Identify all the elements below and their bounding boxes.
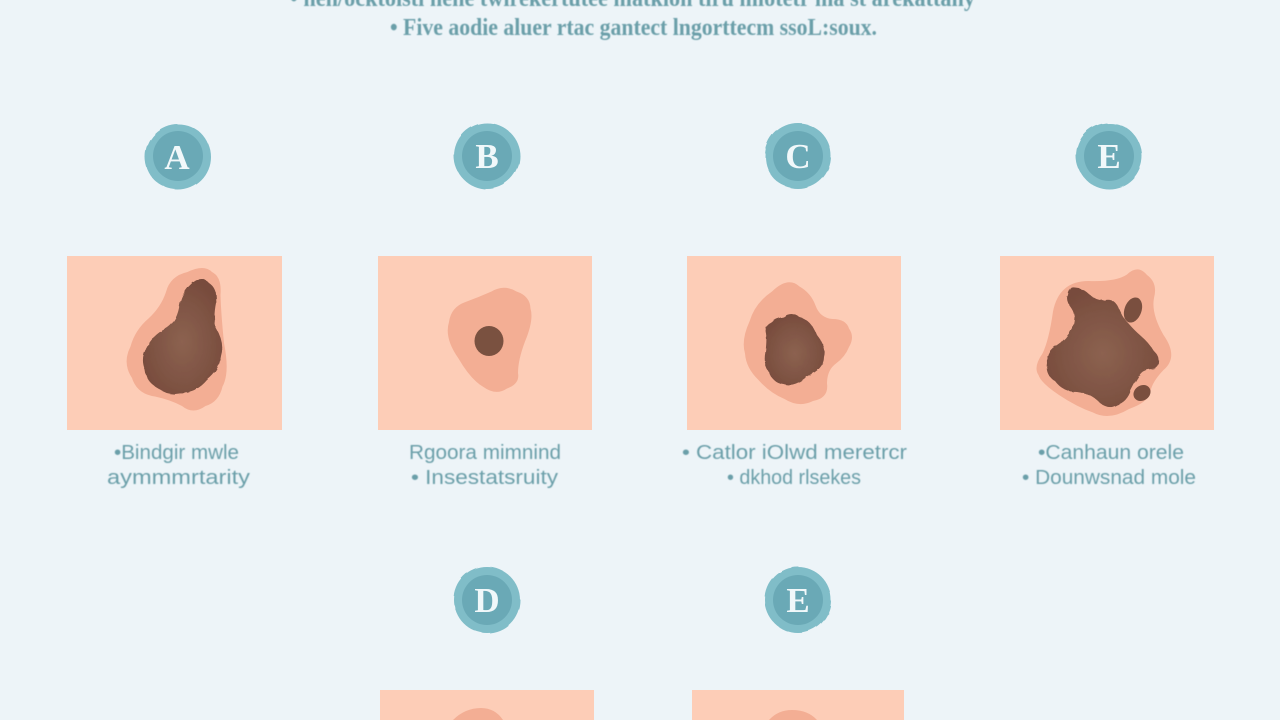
mole [765, 314, 825, 385]
caption: panel A: •Bindgir mwle [114, 442, 239, 464]
caption: panel E [1022, 442, 1196, 489]
badge: B [454, 123, 520, 189]
halo [127, 268, 227, 410]
badge: E bottom row [765, 567, 831, 633]
panel: bottom right, cropped [692, 690, 904, 720]
halo [744, 282, 852, 404]
caption: panel B [409, 442, 561, 489]
halo [769, 710, 817, 720]
panel: irregular mole [1000, 256, 1214, 430]
badge: D [454, 567, 520, 633]
badge: C: C [785, 137, 811, 176]
caption: panel C: • dkhod rlsekes [727, 467, 861, 489]
caption: panel C: • Catlor iOlwd meretrcr [682, 442, 907, 464]
halo [1036, 269, 1171, 416]
panel: asymmetrical mole [67, 256, 282, 430]
badge: A: A [164, 138, 190, 177]
panel: color variation mole [687, 256, 901, 430]
mole [143, 279, 222, 394]
mole [474, 326, 504, 356]
caption: panel B: Rgoora mimnind [409, 442, 561, 464]
satellite spot upper [1121, 295, 1145, 325]
badge: E bottom row: E [786, 581, 810, 620]
badge: E top row: E [1097, 137, 1121, 176]
caption: panel A: aymmmrtarity [107, 467, 250, 489]
caption: panel E: • Dounwsnad mole [1022, 467, 1196, 489]
badge: E top row [1076, 123, 1142, 189]
intro line 2: • Five aodie aluer rtac gantect lngorttecm ssoL:soux. [390, 15, 877, 41]
caption: panel B: • Insestatsruity [411, 467, 558, 489]
intro text [290, 0, 975, 41]
panel: bottom left, cropped [380, 690, 594, 720]
badge: B: B [475, 137, 499, 176]
caption: panel A [107, 442, 250, 489]
badge: C [765, 123, 831, 189]
badge: A [145, 124, 211, 190]
badge: D: D [474, 581, 500, 620]
satellite spot lower [1130, 382, 1154, 404]
mole [1047, 288, 1159, 407]
panel: small mole [378, 256, 592, 430]
caption: panel E: •Canhaun orele [1038, 442, 1184, 464]
caption: panel C [682, 442, 907, 489]
halo [453, 708, 503, 720]
halo [448, 288, 531, 392]
